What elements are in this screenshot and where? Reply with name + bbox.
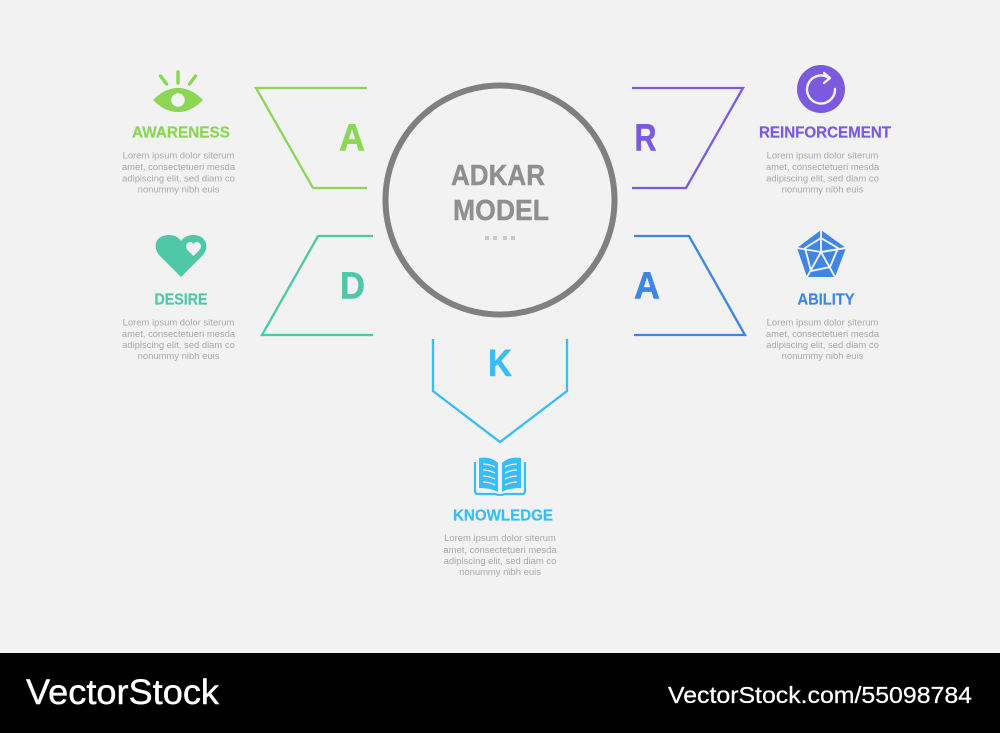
icon: eye (153, 72, 203, 112)
footer brand: VectorStock (26, 673, 220, 712)
awareness heading: AWARENESS (132, 124, 230, 142)
footer url: VectorStock.com/55098784 (668, 682, 972, 708)
ability heading: ABILITY (798, 292, 855, 308)
panel: desire (122, 235, 373, 362)
desire letter frame: D (340, 266, 365, 308)
reinforcement text: Lorem ipsum dolor siterum (767, 150, 878, 162)
awareness text (122, 150, 236, 196)
desire letter frame (262, 236, 373, 335)
knowledge text: nonummy nibh euis (459, 567, 541, 578)
desire text: amet, consectetueri mesda (122, 329, 236, 340)
reinforcement heading: REINFORCEMENT (759, 124, 891, 142)
icon: refresh circle (797, 65, 845, 113)
ability text: amet, consectetueri mesda (766, 329, 880, 340)
awareness letter frame: A (339, 118, 365, 160)
center circle with title: ADKAR (451, 160, 545, 192)
panel: reinforcement (632, 65, 891, 196)
ability text: nonummy nibh euis (782, 351, 864, 362)
reinforcement letter frame (632, 88, 743, 188)
reinforcement text: adipiscing elit, sed diam co (766, 174, 879, 184)
desire text: Lorem ipsum dolor siterum (123, 318, 234, 328)
desire text (122, 318, 236, 362)
knowledge letter frame: K (488, 343, 512, 385)
panel: ability (634, 230, 880, 362)
center circle with title: MODEL (453, 195, 549, 227)
desire heading: DESIRE (154, 292, 208, 308)
awareness text: Lorem ipsum dolor siterum (123, 150, 234, 162)
knowledge text: amet, consectetueri mesda (443, 545, 557, 556)
ability text: Lorem ipsum dolor siterum (767, 318, 878, 328)
panel: knowledge (433, 339, 567, 578)
icon: radar pentagon (797, 230, 846, 277)
knowledge text: adipiscing elit, sed diam co (444, 556, 556, 567)
knowledge text: Lorem ipsum dolor siterum (444, 533, 556, 544)
reinforcement text (766, 150, 880, 196)
reinforcement text: nonummy nibh euis (782, 184, 864, 196)
icon: heart (156, 235, 206, 277)
center circle with title (386, 86, 614, 314)
panel: awareness (122, 72, 367, 196)
desire text: adipiscing elit, sed diam co (122, 340, 235, 351)
knowledge text (443, 533, 557, 578)
reinforcement text: amet, consectetueri mesda (766, 162, 880, 173)
footer bar (0, 653, 1000, 733)
ability letter frame: A (634, 266, 660, 308)
ability letter frame (634, 236, 745, 335)
ability text (766, 318, 880, 362)
ability text: adipiscing elit, sed diam co (766, 340, 879, 351)
awareness text: nonummy nibh euis (138, 184, 220, 196)
reinforcement letter frame: R (634, 118, 656, 160)
desire text: nonummy nibh euis (138, 351, 220, 362)
awareness text: amet, consectetueri mesda (122, 162, 236, 173)
icon: open book (475, 458, 525, 495)
awareness letter frame (256, 88, 367, 188)
awareness text: adipiscing elit, sed diam co (122, 174, 235, 184)
knowledge heading: KNOWLEDGE (453, 508, 553, 524)
knowledge letter frame (433, 339, 567, 442)
